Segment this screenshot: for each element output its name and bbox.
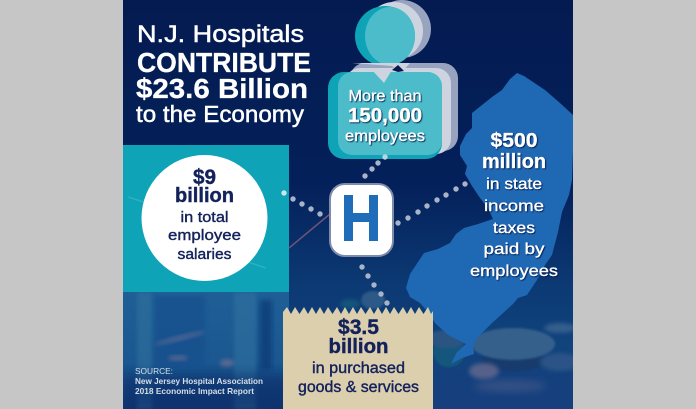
map: New Jersey — [406, 73, 573, 364]
icon: employee figure: 150,000 — [348, 105, 422, 127]
title: to the Economy — [136, 101, 304, 127]
source note: 2018 Economic Impact Report — [135, 386, 254, 396]
state income tax text — [470, 130, 558, 280]
panel streaks — [128, 197, 266, 268]
title: N.J. Hospitals — [137, 21, 304, 48]
circle: salaries: salaries — [178, 246, 232, 263]
paper: purchased goods: billion — [328, 336, 388, 358]
state income tax text: million — [482, 151, 546, 173]
title — [136, 21, 311, 127]
paper: purchased goods: goods & services — [298, 379, 419, 396]
title: $23.6 Billion — [136, 73, 308, 104]
photo: coins and bowls — [433, 321, 573, 394]
circle: salaries — [142, 155, 268, 281]
teal salaries panel — [123, 145, 289, 292]
state income tax text: income — [484, 198, 544, 215]
source note: SOURCE: — [135, 366, 173, 376]
paper: purchased goods — [283, 307, 433, 409]
icon: employee figure: More than — [348, 88, 422, 105]
streak — [289, 214, 330, 248]
background glow — [340, 291, 385, 309]
state income tax text: paid by — [484, 241, 544, 258]
icon: employee figure: employees — [345, 128, 425, 145]
dotted connectors — [281, 154, 468, 306]
circle: salaries: $9 — [193, 166, 216, 189]
state income tax text: $500 — [490, 130, 538, 152]
infographic canvas — [123, 0, 573, 409]
state income tax text: in state — [486, 176, 542, 193]
circle: salaries: billion — [175, 185, 234, 207]
photo: hospital corridor — [123, 292, 289, 409]
source note — [135, 366, 263, 396]
paper: purchased goods: in purchased — [312, 360, 405, 377]
navy panel — [123, 0, 580, 409]
state income tax text: employees — [470, 263, 558, 280]
source note: New Jersey Hospital Association — [135, 376, 263, 386]
title: CONTRIBUTE — [137, 47, 311, 78]
icon: hospital H — [330, 184, 393, 256]
icon: employee figure — [328, 0, 458, 159]
circle: salaries: in total — [180, 209, 228, 226]
paper: purchased goods: $3.5 — [338, 316, 379, 339]
circle: salaries: employee — [168, 227, 241, 244]
state income tax text: taxes — [493, 220, 535, 237]
